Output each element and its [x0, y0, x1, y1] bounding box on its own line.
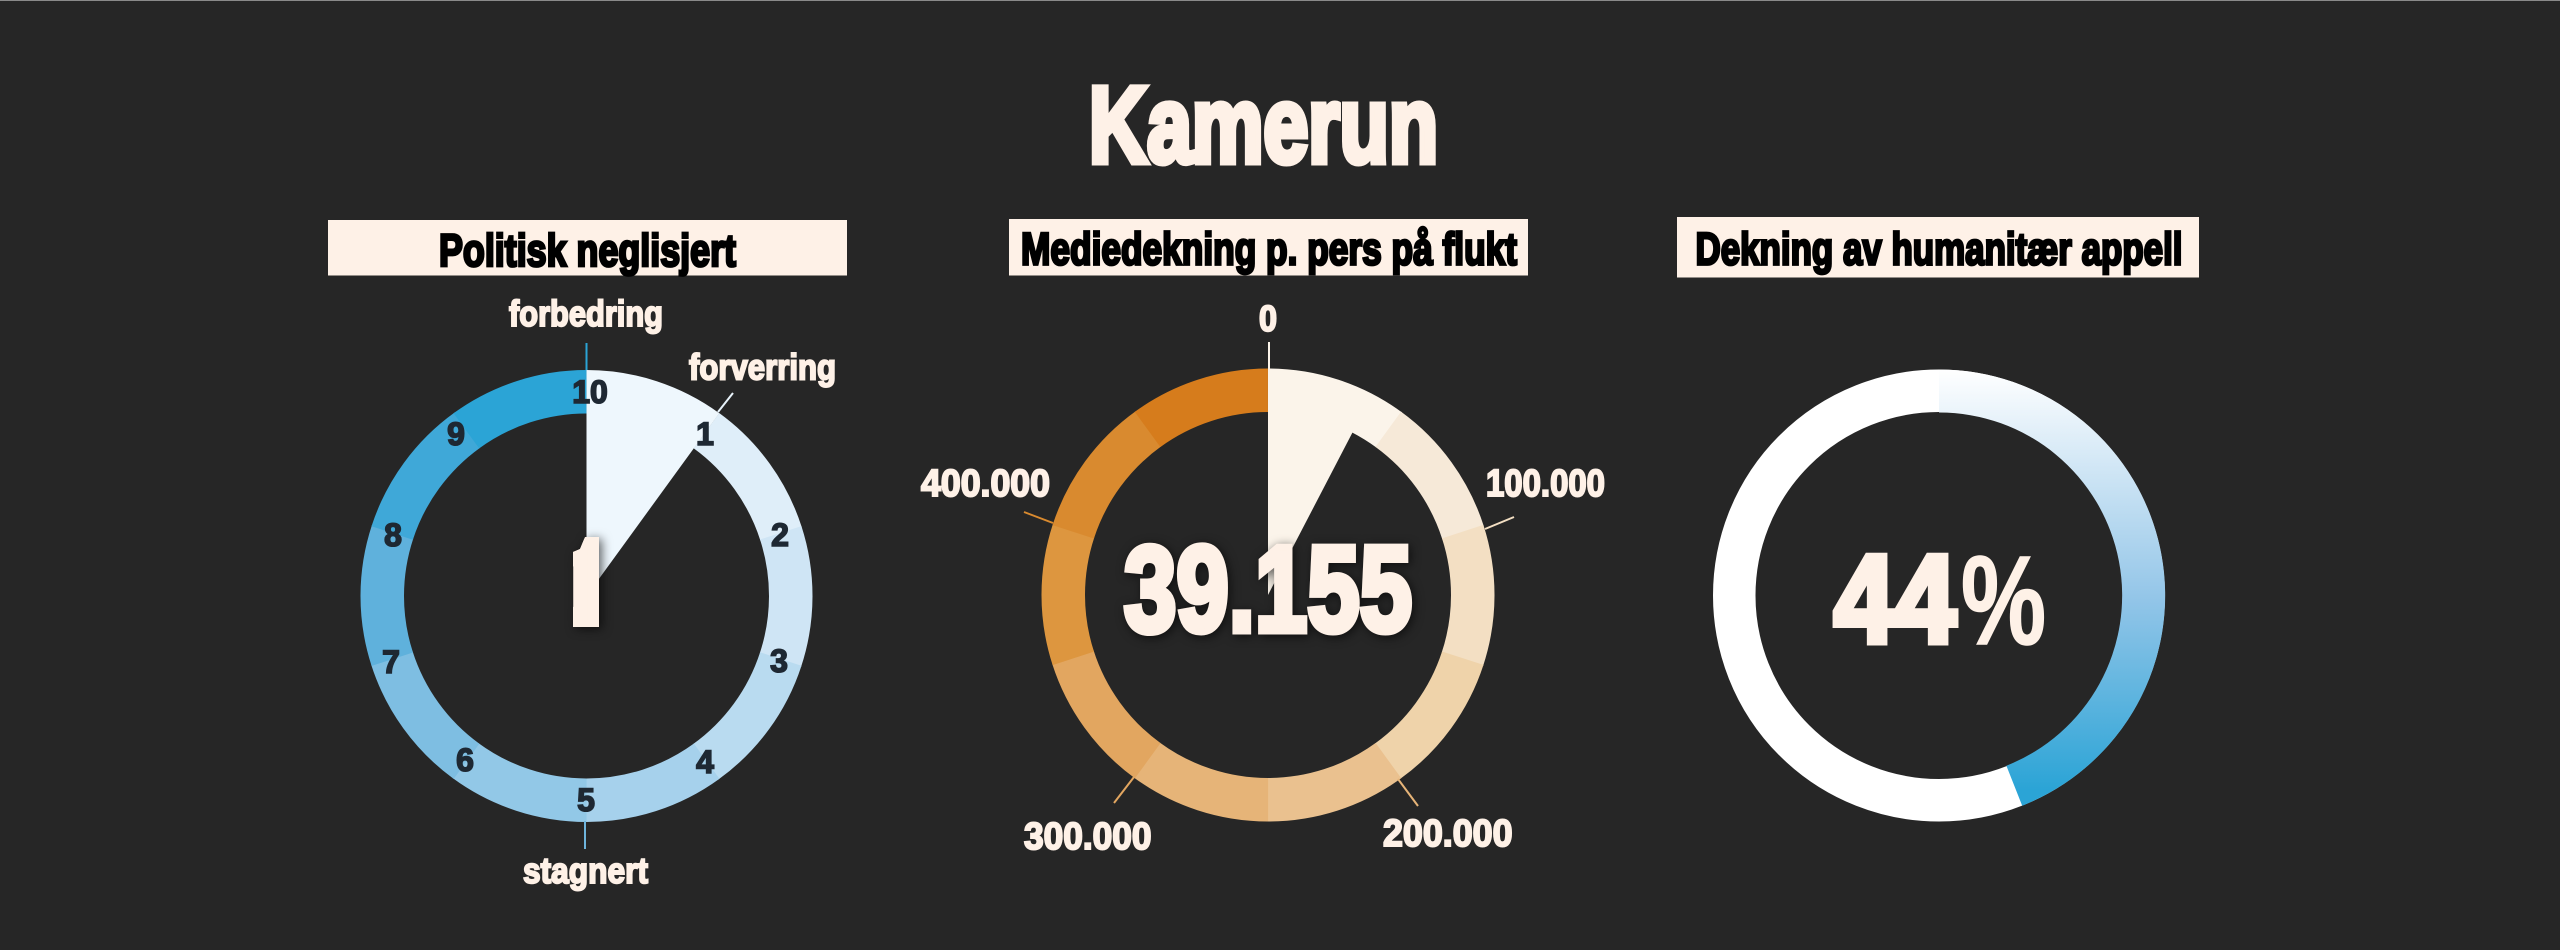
scale numbers: 2: [771, 517, 789, 553]
tick: 100.000: [1485, 517, 1514, 529]
tick: stagnert: [584, 821, 586, 849]
scale numbers: 4: [696, 744, 714, 780]
tick: 400.000: [1024, 512, 1053, 523]
donut: covered 44%: [1939, 369, 2165, 806]
tick: forverring: [718, 393, 733, 412]
tick: 200.000: [1398, 779, 1418, 806]
dial: media coverage ring: [982, 309, 1554, 881]
scale numbers: 8: [384, 517, 402, 553]
heading: dekning av humanitær appell: [1677, 217, 2199, 278]
value: 44%: [1834, 530, 2046, 671]
label: 0: 0: [1259, 298, 1277, 339]
heading: politisk neglisjert: Politisk neglisjert: [439, 225, 736, 276]
heading: politisk neglisjert: [328, 220, 847, 276]
scale numbers: 10: [572, 374, 608, 410]
panel: politisk neglisjert: [301, 220, 872, 891]
scale numbers: 6: [456, 742, 474, 778]
label: forbedring: forbedring: [509, 293, 663, 334]
donut: remainder: [1734, 391, 2144, 800]
label: 400.000: 400.000: [921, 463, 1050, 505]
panel: dekning av humanitær appell: [1677, 217, 2199, 806]
label: forverring: forverring: [689, 346, 836, 388]
label: 200.000: 200.000: [1383, 813, 1512, 855]
scale numbers: [382, 374, 789, 818]
heading: dekning av humanitær appell: Dekning av humanitær appell: [1696, 224, 2182, 274]
title: Kamerun: [1089, 64, 1438, 185]
value: 44%: 44: [1834, 531, 1956, 669]
heading: mediedekning: Mediedekning p. pers på flukt: [1021, 224, 1517, 274]
dial: political scale ring: [301, 311, 872, 881]
scale numbers: 5: [577, 782, 595, 818]
tick: 300.000: [1114, 777, 1134, 803]
scale numbers: 7: [382, 644, 400, 680]
label: 100.000: 100.000: [1486, 463, 1605, 505]
value: 1: 1: [550, 512, 622, 655]
value: 39.155: 39.155: [1124, 521, 1412, 657]
value wedge: [586, 370, 719, 596]
value: 44%: %: [1961, 530, 2046, 671]
label: stagnert: stagnert: [523, 850, 648, 891]
scale numbers: 1: [696, 416, 714, 452]
tick: forbedring: [586, 343, 588, 370]
value wedge: [1268, 408, 1354, 595]
panel: mediedekning: [921, 219, 1605, 881]
tick: 0: [1268, 342, 1270, 369]
scale numbers: 9: [447, 416, 465, 452]
label: 300.000: 300.000: [1024, 816, 1152, 858]
scale numbers: 3: [770, 643, 788, 679]
